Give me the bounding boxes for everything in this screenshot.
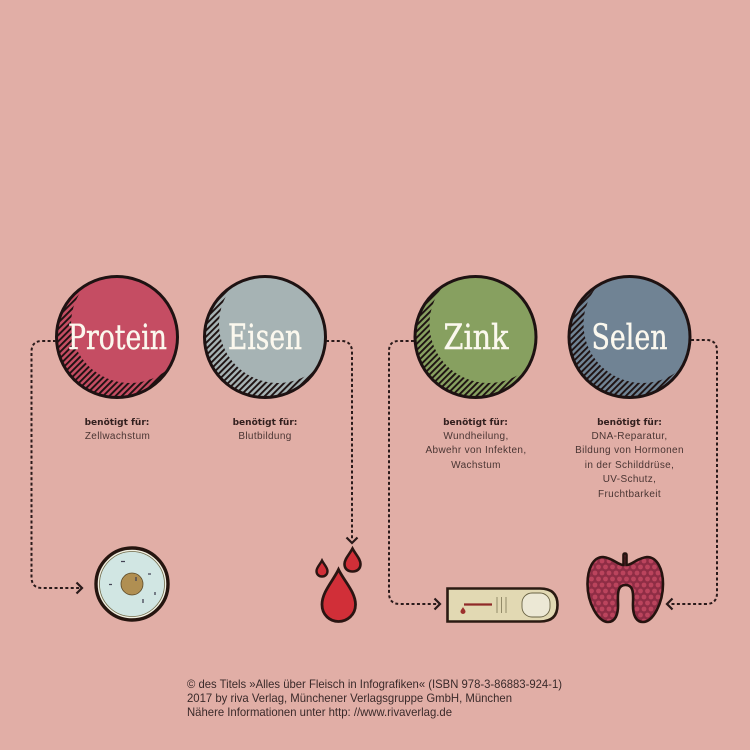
- panel: Selen circle: [568, 275, 692, 399]
- text block: Eisen uses: [233, 418, 297, 442]
- panel: Protein circle: Protein: [68, 318, 167, 358]
- text block: Zink uses: Wundheilung,: [443, 431, 509, 442]
- text block: copyright footer: © des Titels »Alles über Fleisch in Infografiken« (ISBN 978-3-86883-924-1): [187, 677, 562, 691]
- text block: Eisen uses: benötigt für:: [233, 418, 297, 428]
- text block: Protein uses: Zellwachstum: [85, 431, 150, 442]
- text block: copyright footer: 2017 by riva Verlag, Münchener Verlagsgruppe GmbH, München: [187, 691, 512, 705]
- text block: Zink uses: [426, 418, 526, 471]
- icon: thyroid: [588, 554, 663, 622]
- panel: Zink circle: Zink: [444, 318, 509, 358]
- panel: Protein circle: [55, 275, 179, 399]
- icon: blood drops: [316, 548, 360, 622]
- panel: Eisen circle: Eisen: [228, 318, 302, 358]
- arrow: Protein to cell: [32, 341, 82, 594]
- text block: Selen uses: benötigt für:: [597, 418, 662, 428]
- text block: Selen uses: Bildung von Hormonen: [575, 445, 684, 456]
- text block: Zink uses: Abwehr von Infekten,: [426, 445, 526, 456]
- text block: Selen uses: UV-Schutz,: [603, 474, 656, 485]
- panel: Selen circle: Selen: [592, 318, 668, 358]
- panel: Zink circle: [414, 275, 538, 399]
- icon: cell: [96, 548, 168, 620]
- arrow: Zink to finger: [389, 341, 440, 610]
- arrow: Eisen to blood drops: [326, 341, 358, 543]
- text block: Selen uses: [575, 418, 684, 500]
- text block: Eisen uses: Blutbildung: [238, 431, 292, 442]
- panel: Eisen circle: [203, 275, 327, 399]
- text block: Protein uses: [85, 418, 150, 442]
- arrow: Selen to thyroid: [667, 340, 717, 610]
- text block: Zink uses: benötigt für:: [443, 418, 508, 428]
- text block: Selen uses: in der Schilddrüse,: [585, 460, 674, 471]
- text block: Protein uses: benötigt für:: [85, 418, 149, 428]
- text block: Zink uses: Wachstum: [451, 460, 501, 471]
- text block: Selen uses: Fruchtbarkeit: [598, 489, 661, 500]
- text block: copyright footer: Nähere Informationen unter http: //www.rivaverlag.de: [187, 705, 452, 719]
- text block: Selen uses: DNA-Reparatur,: [591, 431, 668, 442]
- text block: copyright footer: [187, 677, 562, 719]
- icon: finger with cut: [448, 588, 558, 622]
